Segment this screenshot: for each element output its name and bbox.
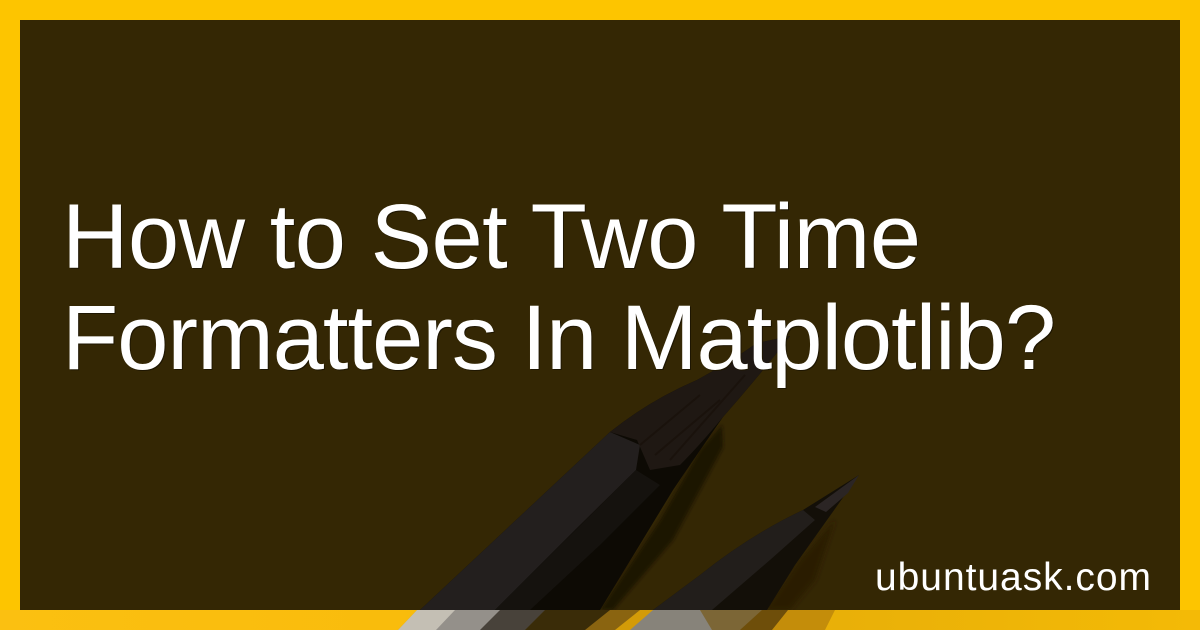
title: Formatters In Matplotlib? <box>63 288 1057 390</box>
icon: large pencil <box>420 336 790 610</box>
bottom strip with pencil bodies <box>0 610 1200 630</box>
title: Formatters In Matplotlib? <box>62 287 1056 389</box>
title: How to Set Two Time <box>62 186 921 288</box>
shadow of small pencil <box>770 527 830 608</box>
shadow of large pencil <box>600 425 723 610</box>
site name: ubuntuask.com <box>875 556 1151 599</box>
icon: small pencil <box>653 475 859 610</box>
title: How to Set Two Time <box>63 187 922 289</box>
pencils image area <box>420 336 859 610</box>
title <box>62 186 1057 390</box>
